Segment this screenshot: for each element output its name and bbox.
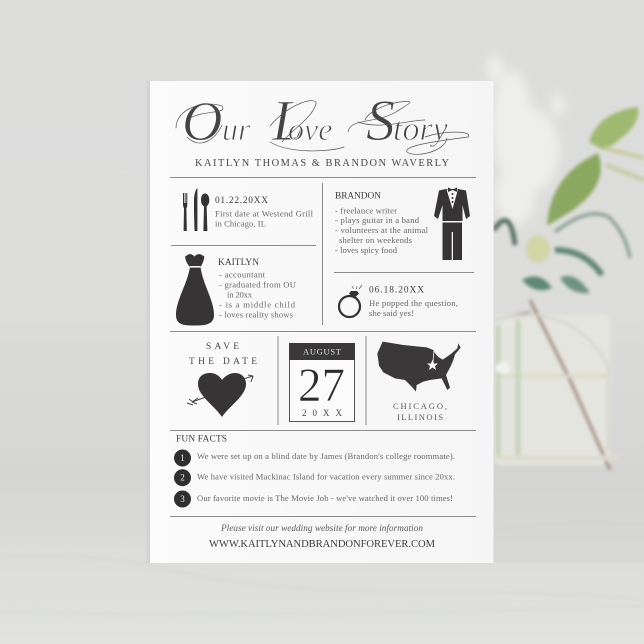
fact 3: 3 — [180, 494, 185, 504]
description: she said yes! — [369, 308, 414, 318]
panel: first date — [183, 188, 314, 231]
list: shelter on weekends — [339, 235, 413, 245]
website url: WWW.KAITLYNANDBRANDONFOREVER.COM — [209, 539, 436, 550]
list: in 20xx — [227, 289, 253, 299]
list: - is a middle child — [219, 299, 296, 309]
fact 2: 2 — [180, 473, 185, 483]
list: - loves spicy food — [335, 245, 398, 255]
description — [215, 208, 314, 229]
fact 3 — [174, 490, 453, 508]
list: - freelance writer — [335, 205, 397, 215]
icon: fork, knife and spoon — [183, 188, 209, 231]
fact 1: We were set up on a blind date by James (Brandon's college roommate). — [197, 451, 455, 461]
date: 01.22.20XX — [215, 196, 268, 206]
title: O — [182, 91, 222, 153]
heading: SAVE — [206, 342, 239, 352]
list: - accountant — [219, 269, 266, 279]
icon: dress — [176, 254, 214, 326]
heading: BRANDON — [335, 191, 381, 201]
icon: USA map with star — [377, 342, 461, 392]
icon: heart with arrow — [187, 373, 253, 417]
description: in Chicago, IL — [215, 219, 266, 229]
heading: FUN FACTS — [176, 435, 227, 445]
panel: save the date — [187, 342, 257, 417]
list — [335, 205, 429, 255]
description: First date at Westend Grill — [215, 208, 314, 218]
subtitle: couple names: KAITLYN THOMAS & BRANDON WAVERLY — [195, 158, 449, 169]
heading: KAITLYN — [218, 258, 259, 268]
panel: fun facts — [174, 435, 455, 508]
fact 1: 1 — [180, 453, 185, 463]
location text — [393, 401, 447, 422]
list: - volunteers at the animal — [335, 225, 429, 235]
fact 2: We have visited Mackinac Island for vacation every summer since 20xx. — [197, 472, 455, 482]
website invitation line: Please visit our wedding website for more information — [220, 523, 423, 533]
calendar: 20XX — [302, 408, 342, 418]
title: ove — [288, 111, 332, 147]
title: tory — [393, 111, 449, 148]
panel: proposal — [339, 285, 458, 318]
title: S — [366, 88, 395, 153]
list: - loves reality shows — [219, 309, 294, 319]
title: L — [271, 88, 304, 153]
list — [219, 269, 297, 319]
icon: tuxedo — [434, 188, 470, 260]
card — [146, 81, 494, 563]
panel: Brandon — [335, 188, 470, 260]
calendar: AUGUST — [303, 346, 342, 356]
fact 2 — [174, 469, 455, 486]
panel: Kaitlyn — [176, 254, 297, 326]
title — [176, 88, 469, 154]
icon: ring — [339, 285, 362, 317]
panel: location — [377, 342, 461, 422]
plant in glass vase — [487, 54, 644, 470]
calendar — [289, 343, 355, 422]
fact 3: Our favorite movie is The Movie Job - we've watched it over 100 times! — [197, 493, 453, 503]
list: - plays guitar in a band — [335, 215, 420, 225]
calendar: 27 — [298, 359, 345, 412]
heading: THE DATE — [189, 357, 257, 367]
description: He popped the question, — [369, 298, 458, 308]
heading — [189, 342, 257, 367]
location text: ILLINOIS — [397, 412, 443, 422]
fact 1 — [174, 450, 455, 466]
list: - graduated from OU — [219, 279, 297, 289]
location text: CHICAGO, — [393, 401, 447, 411]
description — [369, 298, 458, 318]
title: ur — [222, 111, 251, 147]
date: 06.18.20XX — [369, 286, 424, 296]
